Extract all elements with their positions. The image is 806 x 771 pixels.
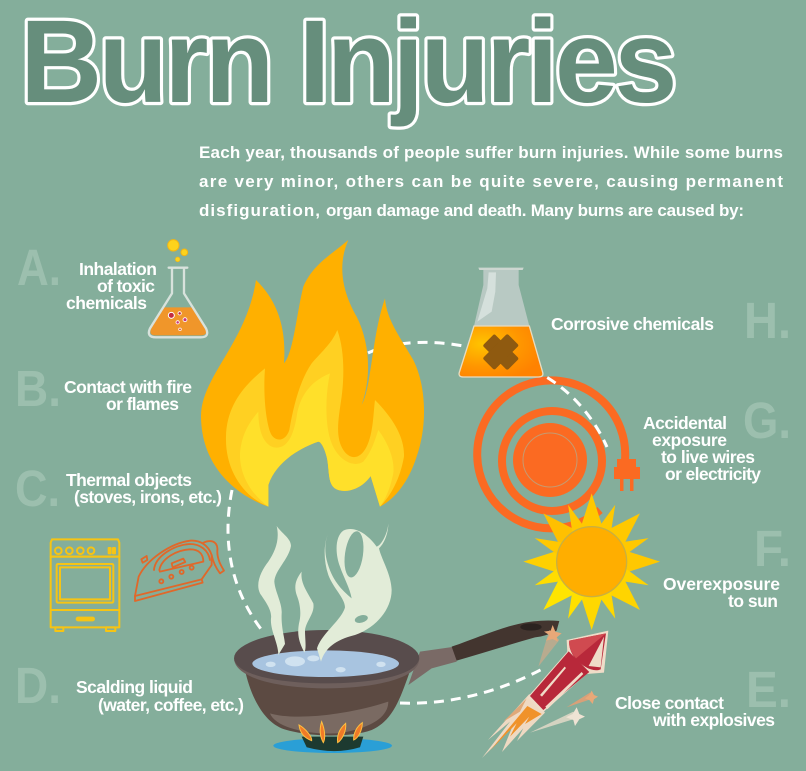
letter markers: B. [15,360,61,417]
intro paragraph: are very minor, others can be quite severe, causing permanent [199,172,783,191]
label C: thermal objects: (stoves, irons, etc.) [74,487,222,507]
letter markers: H. [744,292,791,349]
letter markers: G. [743,392,791,449]
icon: steam [258,523,392,662]
icon: pan on burner [234,621,559,753]
intro paragraph: Each year, thousands of people suffer burn injuries. While some burns [199,143,783,162]
letter markers [15,239,791,718]
label A: inhalation: Inhalation [79,259,157,279]
dashed connecting circle [228,342,607,703]
label E: explosives [615,693,775,730]
letter markers: F. [754,520,791,577]
intro paragraph: organ damage and death. Many burns are caused by: [326,201,744,220]
letter markers: A. [17,239,61,296]
letter markers: D. [15,657,61,714]
letter markers: E. [746,661,791,718]
label F: sun [663,574,780,611]
label C: thermal objects [66,470,222,507]
label G: electricity [643,413,761,484]
label A: inhalation: of toxic [97,276,155,296]
label E: explosives: Close contact [615,693,724,713]
label D: scalding liquid: Scalding liquid [76,677,193,697]
intro paragraph [199,143,783,220]
label B: fire [64,377,192,414]
label C: thermal objects: Thermal objects [66,470,192,490]
label G: electricity: exposure [652,430,727,450]
label E: explosives: with explosives [652,710,775,730]
icon: electric coil and plug [477,380,640,528]
icon: toxic flask [149,240,207,337]
label G: electricity: Accidental [643,413,727,433]
label D: scalding liquid [76,677,244,715]
icon: fire [201,240,424,507]
label G: electricity: or electricity [665,464,761,484]
letter markers: C. [15,460,60,517]
label A: inhalation: chemicals [66,293,147,313]
label F: sun: Overexposure [663,574,780,594]
label G: electricity: to live wires [661,447,755,467]
label D: scalding liquid: (water, coffee, etc.) [98,695,244,715]
icon: corrosive flask [459,268,543,377]
intro paragraph: disfiguration, [199,201,320,220]
label B: fire: Contact with fire [64,377,192,397]
label B: fire: or flames [106,394,179,414]
icon: sun [523,493,660,630]
icon: iron [135,541,224,601]
label H: corrosive chemicals: Corrosive chemicals [551,314,714,334]
label F: sun: to sun [728,591,778,611]
label A: inhalation [66,259,157,313]
icon: stove [51,539,119,631]
icon: firework rocket [482,625,608,758]
